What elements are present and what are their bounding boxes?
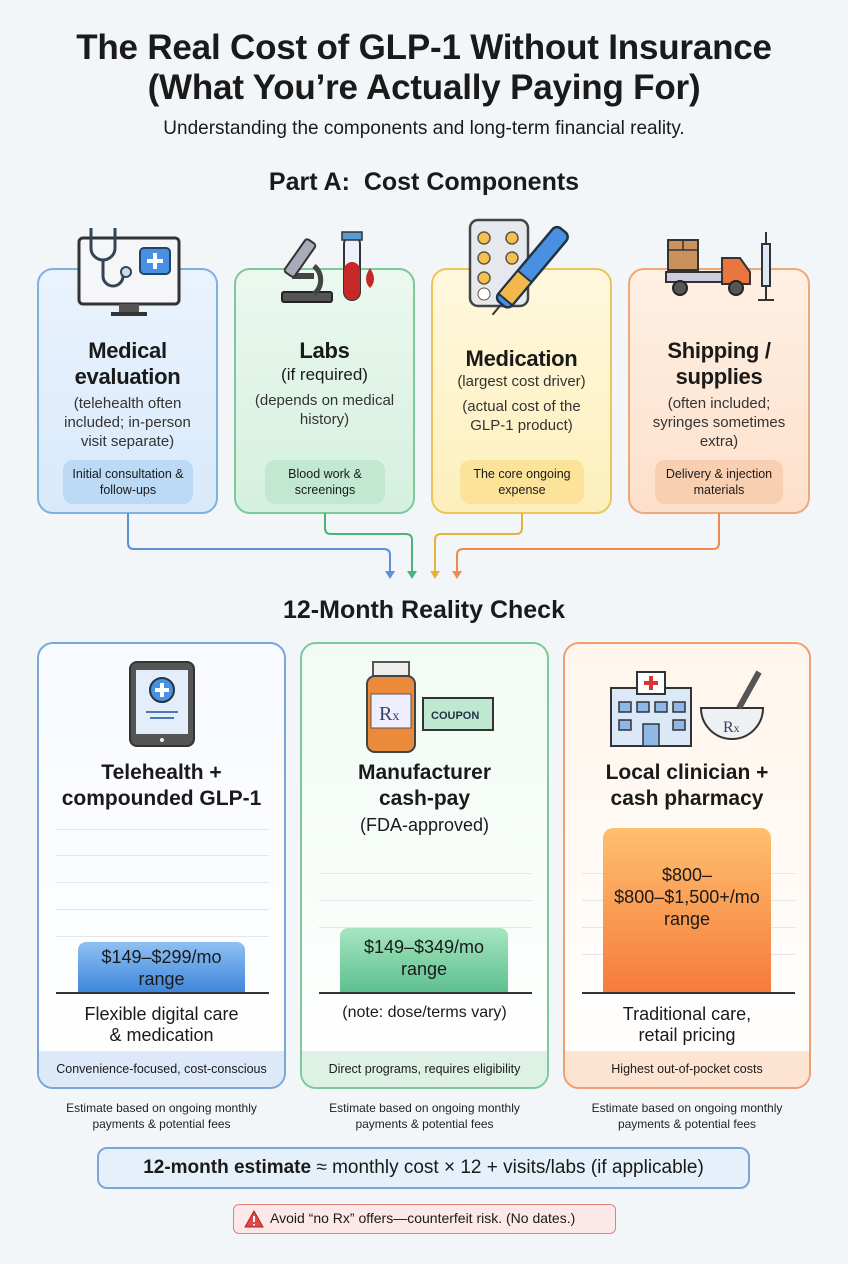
band: Convenience-focused, cost-conscious xyxy=(56,1062,267,1076)
icon: microscope test tube xyxy=(281,231,374,303)
note: Estimate based on ongoing monthly xyxy=(592,1101,782,1115)
icon: monitor stethoscope xyxy=(78,228,180,316)
label: compounded GLP-1 xyxy=(62,787,261,810)
panel: labs: (depends on medical history) xyxy=(255,392,394,428)
icon: rx bottle coupon: Rx xyxy=(379,703,399,725)
pill: delivery: Delivery & injection materials xyxy=(666,467,772,497)
band xyxy=(39,1051,284,1087)
formula box xyxy=(97,1147,750,1189)
note: payments & potential fees xyxy=(618,1117,756,1131)
note: payments & potential fees xyxy=(92,1117,231,1131)
description: retail pricing xyxy=(638,1025,736,1045)
panel: medical evaluation xyxy=(37,268,218,514)
label: cash-pay xyxy=(379,787,470,810)
bar xyxy=(78,942,245,992)
label: Telehealth + xyxy=(101,761,222,784)
note xyxy=(592,1101,782,1131)
pill: blood work: Blood work & screenings xyxy=(288,467,362,497)
panel: medication xyxy=(431,268,612,514)
band xyxy=(302,1051,547,1087)
description: Traditional care, xyxy=(623,1004,751,1024)
note: Estimate based on ongoing monthly xyxy=(66,1101,257,1115)
band xyxy=(565,1051,809,1087)
note xyxy=(329,1101,520,1131)
pill: blood work xyxy=(265,460,385,504)
panel: manufacturer xyxy=(300,642,549,1089)
bar: range xyxy=(401,959,447,979)
label: (FDA-approved) xyxy=(360,815,489,835)
arrows: converge xyxy=(127,513,720,579)
band: Direct programs, requires eligibility xyxy=(329,1062,520,1076)
panel: labs xyxy=(234,268,415,514)
warning callout: Avoid “no Rx” offers—counterfeit risk. (No dates.) xyxy=(270,1210,575,1226)
label xyxy=(358,761,491,835)
icon: pills and pen xyxy=(468,218,569,316)
panel: labs: Labs xyxy=(299,338,350,363)
bar: $800–$1,500+/mo xyxy=(614,887,760,907)
icon: warning xyxy=(244,1210,264,1228)
description xyxy=(623,1004,751,1045)
icon: hospital mortar xyxy=(610,670,764,747)
bar: range xyxy=(138,969,185,989)
note: Estimate based on ongoing monthly xyxy=(329,1101,520,1115)
heading: 12-month reality check: 12-Month Reality Check xyxy=(283,596,565,624)
panel: medical evaluation: Medical xyxy=(88,338,167,363)
bar: $149–$349/mo xyxy=(364,937,484,957)
pill: consultation: Initial consultation & follow-ups xyxy=(72,467,184,497)
label xyxy=(606,761,768,810)
pill: core expense xyxy=(460,460,584,504)
description xyxy=(84,1004,239,1045)
bar: $800– xyxy=(662,865,712,885)
icon: tablet xyxy=(129,661,195,747)
panel: shipping: supplies xyxy=(676,364,762,389)
label xyxy=(62,761,261,810)
pill: core expense: The core ongoing expense xyxy=(473,467,571,497)
label: Local clinician + xyxy=(606,761,768,784)
icon: hospital mortar: Rx xyxy=(723,719,740,736)
label: Manufacturer xyxy=(358,761,491,784)
description: Flexible digital care xyxy=(84,1004,239,1024)
note: payments & potential fees xyxy=(355,1117,494,1131)
panel: shipping: Shipping / xyxy=(667,338,771,363)
panel: labs: (if required) xyxy=(281,365,368,384)
panel: medical evaluation: (telehealth often included; in-person visit separate) xyxy=(64,395,191,450)
title: (What You’re Actually Paying For) xyxy=(148,68,700,107)
band: Highest out-of-pocket costs xyxy=(611,1062,763,1076)
panel: shipping: (often included; syringes sometimes extra) xyxy=(653,395,785,450)
bar: range xyxy=(664,909,710,929)
panel: medication: (largest cost driver) xyxy=(457,373,586,390)
panel: local clinician xyxy=(563,642,811,1089)
icon: truck box syringe xyxy=(665,232,774,301)
warning callout xyxy=(233,1204,616,1234)
title: The Real Cost of GLP-1 Without Insurance xyxy=(76,28,772,67)
note xyxy=(66,1101,257,1131)
heading: part A: Part A: Cost Components xyxy=(269,168,579,196)
subtitle: Understanding the components and long-term financial reality. xyxy=(163,118,685,139)
panel: telehealth xyxy=(37,642,286,1089)
icon: rx bottle coupon: COUPON xyxy=(431,710,479,722)
bar xyxy=(603,828,771,992)
label: cash pharmacy xyxy=(611,787,763,810)
icon: rx bottle coupon xyxy=(366,661,494,753)
formula box: 12-month estimate ≈ monthly cost × 12 + visits/labs (if applicable) xyxy=(143,1157,704,1178)
pill: delivery xyxy=(655,460,783,504)
description: (note: dose/terms vary) xyxy=(342,1004,507,1021)
pill: consultation xyxy=(63,460,193,504)
panel: shipping xyxy=(628,268,810,514)
description: & medication xyxy=(109,1025,214,1045)
panel: medication: Medication xyxy=(466,346,577,371)
bar xyxy=(340,928,508,992)
bar: $149–$299/mo xyxy=(101,947,222,967)
panel: medication: (actual cost of the GLP-1 product) xyxy=(462,398,581,434)
title xyxy=(76,28,772,107)
panel: medical evaluation: evaluation xyxy=(75,364,180,389)
